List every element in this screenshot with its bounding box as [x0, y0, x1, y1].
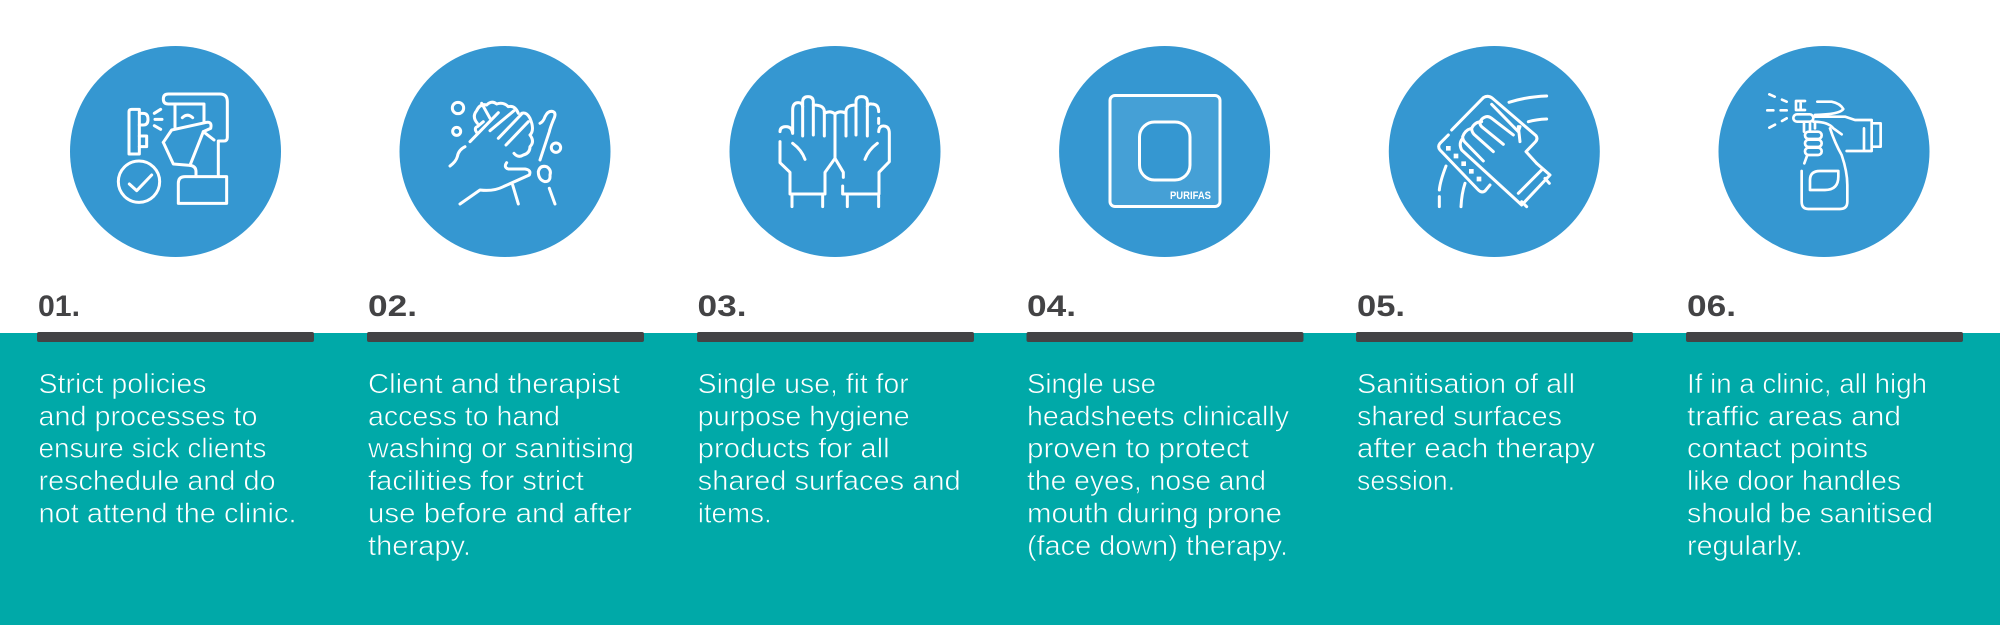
divider bar: [1686, 332, 1963, 342]
text block: purpose hygiene: [698, 400, 910, 431]
panel: step 4: [1026, 46, 1304, 561]
text block: Single use, fit for: [698, 368, 909, 399]
divider bar: [37, 332, 314, 342]
text block: [1357, 368, 1595, 496]
text block: [38, 368, 296, 528]
divider bar: [367, 332, 644, 342]
icon: washing hands: [400, 46, 610, 257]
icon: mask temperature check: [70, 46, 281, 257]
text block: washing or sanitising: [367, 433, 634, 464]
number 02: 02.: [368, 290, 417, 323]
text block: Strict policies: [38, 368, 206, 399]
text block: Sanitisation of all: [1357, 368, 1575, 399]
number 03: 03.: [698, 290, 746, 323]
text block: the eyes, nose and: [1027, 465, 1266, 496]
text block: [698, 368, 961, 528]
divider bar: [1026, 332, 1304, 342]
panel: step 2: [367, 46, 644, 561]
text block: [1687, 368, 1933, 561]
text block: after each therapy: [1357, 433, 1595, 464]
teal background panel: [0, 333, 2000, 625]
text block: and processes to: [38, 400, 258, 431]
panel: step 6: [1686, 46, 1963, 561]
text block: [367, 368, 634, 561]
text block: traffic areas and: [1687, 400, 1901, 431]
number 01: 01.: [38, 290, 80, 323]
text block: Single use: [1027, 368, 1156, 399]
icon: gloved hand wiping: [1389, 46, 1600, 257]
text block: therapy.: [368, 530, 471, 561]
divider bar: [697, 332, 974, 342]
number 04: 04.: [1027, 290, 1076, 323]
divider bar: [1356, 332, 1633, 342]
panel: step 5: [1356, 46, 1633, 496]
text block: If in a clinic, all high: [1687, 368, 1927, 399]
text block: mouth during prone: [1027, 497, 1282, 528]
text block: shared surfaces: [1357, 400, 1562, 431]
text block: (face down) therapy.: [1027, 530, 1288, 561]
text block: headsheets clinically: [1027, 400, 1289, 431]
text block: ensure sick clients: [38, 433, 266, 464]
icon: gloves: [730, 46, 940, 257]
text block: not attend the clinic.: [38, 497, 296, 528]
text block: use before and after: [368, 497, 632, 528]
text block: products for all: [698, 433, 890, 464]
number 05: 05.: [1357, 290, 1405, 323]
text block: [1027, 368, 1289, 561]
text block: proven to protect: [1027, 433, 1249, 464]
text block: session.: [1357, 465, 1455, 496]
text block: facilities for strict: [368, 465, 584, 496]
text block: items.: [698, 497, 772, 528]
text block: regularly.: [1687, 530, 1803, 561]
text block: contact points: [1687, 433, 1868, 464]
number 06: 06.: [1687, 290, 1736, 323]
text block: access to hand: [368, 400, 560, 431]
icon: Purifas headsheet: [1059, 46, 1270, 257]
panel: step 3: [697, 46, 974, 528]
text block: should be sanitised: [1687, 497, 1933, 528]
icon: spray bottle: [1718, 46, 1930, 257]
text block: Client and therapist: [368, 368, 620, 399]
icon: Purifas headsheet: PURIFAS: [1170, 190, 1211, 202]
panel: step 1: [37, 46, 314, 528]
text block: shared surfaces and: [698, 465, 961, 496]
text block: like door handles: [1687, 465, 1901, 496]
text block: reschedule and do: [38, 465, 276, 496]
